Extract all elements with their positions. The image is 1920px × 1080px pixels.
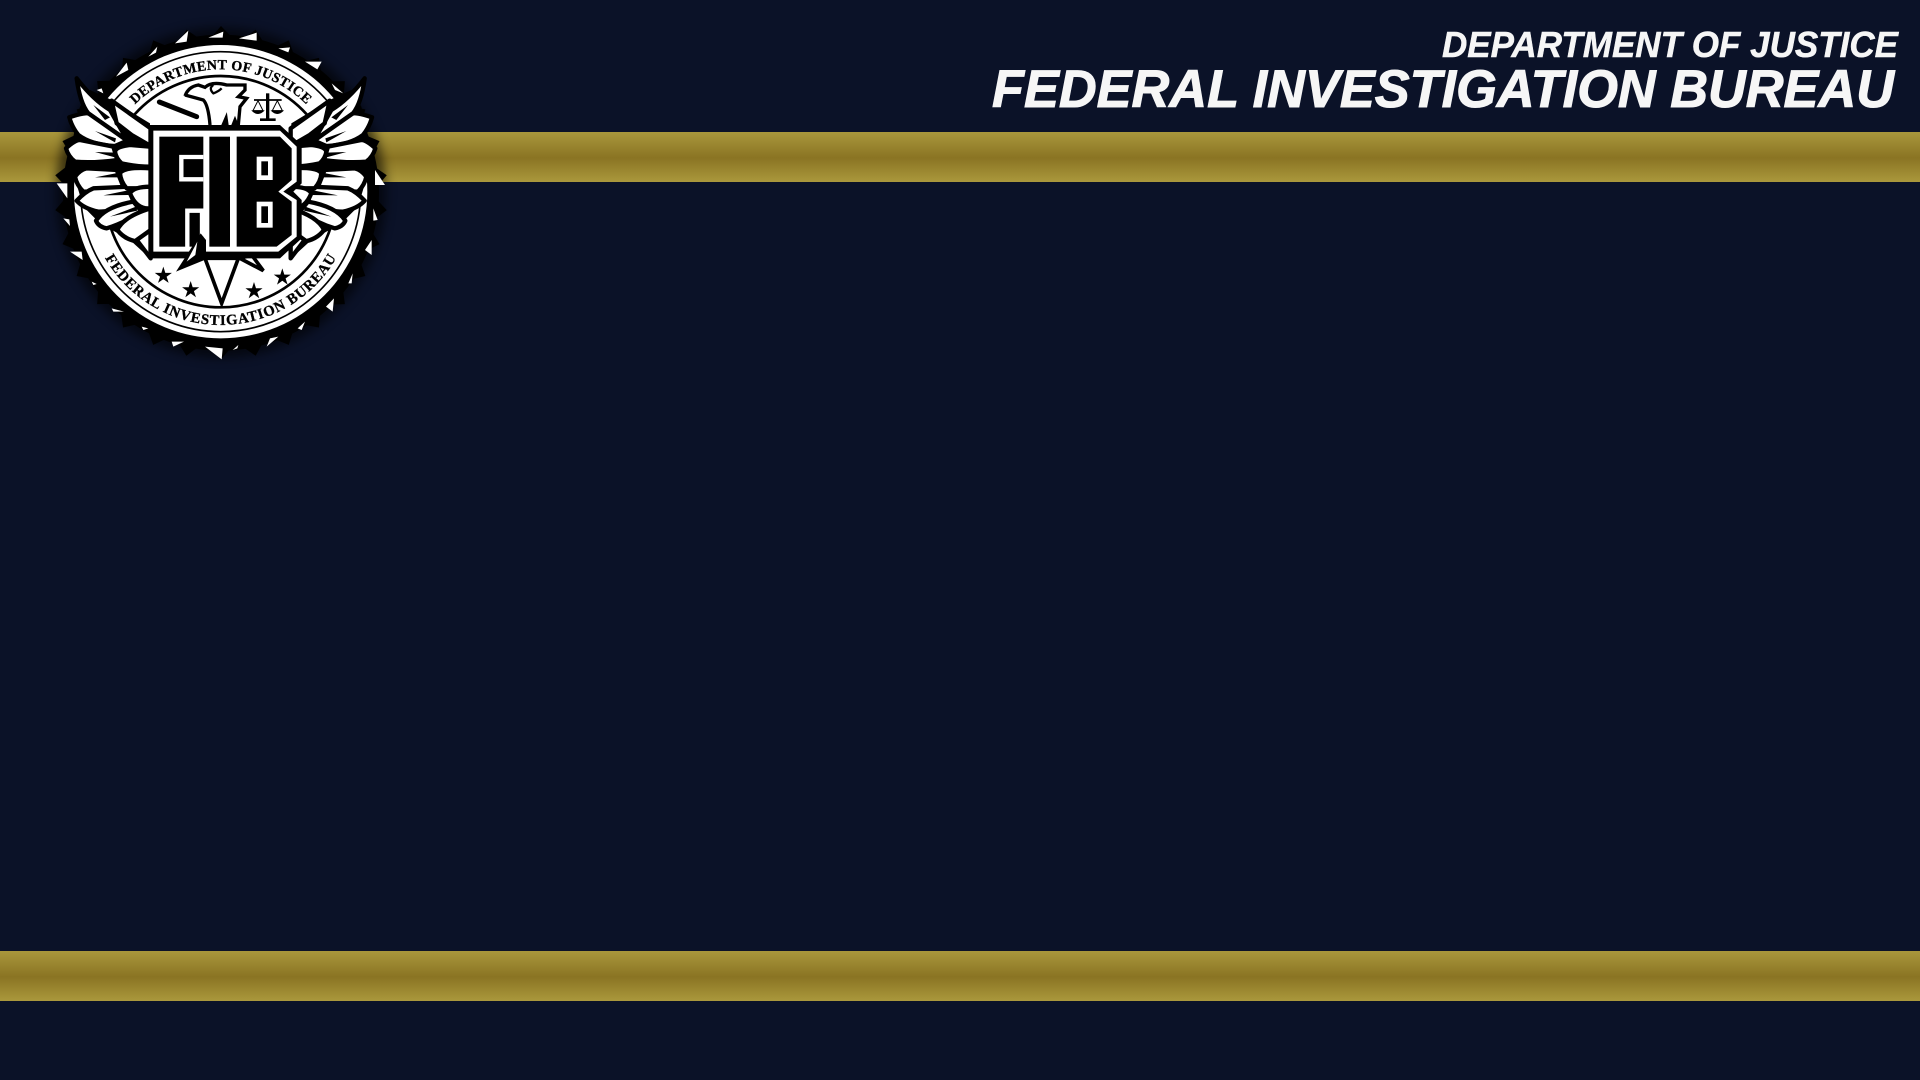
- letter I: [209, 137, 230, 247]
- letter B: [237, 137, 292, 247]
- FIB seal: [50, 26, 392, 360]
- left star spike: [176, 233, 206, 272]
- letter F: [159, 137, 203, 251]
- feathers: [66, 78, 151, 258]
- small stars: [155, 267, 291, 298]
- serrated black edge: [54, 26, 388, 359]
- feather slits: [93, 105, 137, 217]
- eagle head: [185, 83, 247, 125]
- top gold band: [0, 132, 1920, 182]
- bottom gold band: [0, 951, 1920, 1001]
- heading: department of justice: DEPARTMENT OF JUSTICE: [1442, 24, 1899, 65]
- right wing: [291, 78, 375, 258]
- FIB shield: [148, 125, 302, 258]
- ring and disc: [74, 45, 367, 338]
- heading: federal investigation bureau: FEDERAL INVESTIGATION BUREAU: [992, 60, 1896, 119]
- ring text top: DEPARTMENT OF JUSTICE: [128, 60, 312, 104]
- seal shadow: [56, 28, 386, 358]
- ring text bottom: FEDERAL INVESTIGATION BUREAU: [104, 252, 335, 326]
- white chips on edge: [57, 31, 385, 359]
- star spikes under shield: [205, 255, 263, 303]
- scales of justice: [252, 93, 283, 120]
- left wing: [66, 78, 151, 258]
- wing backing: [72, 90, 150, 258]
- baton: [159, 102, 197, 117]
